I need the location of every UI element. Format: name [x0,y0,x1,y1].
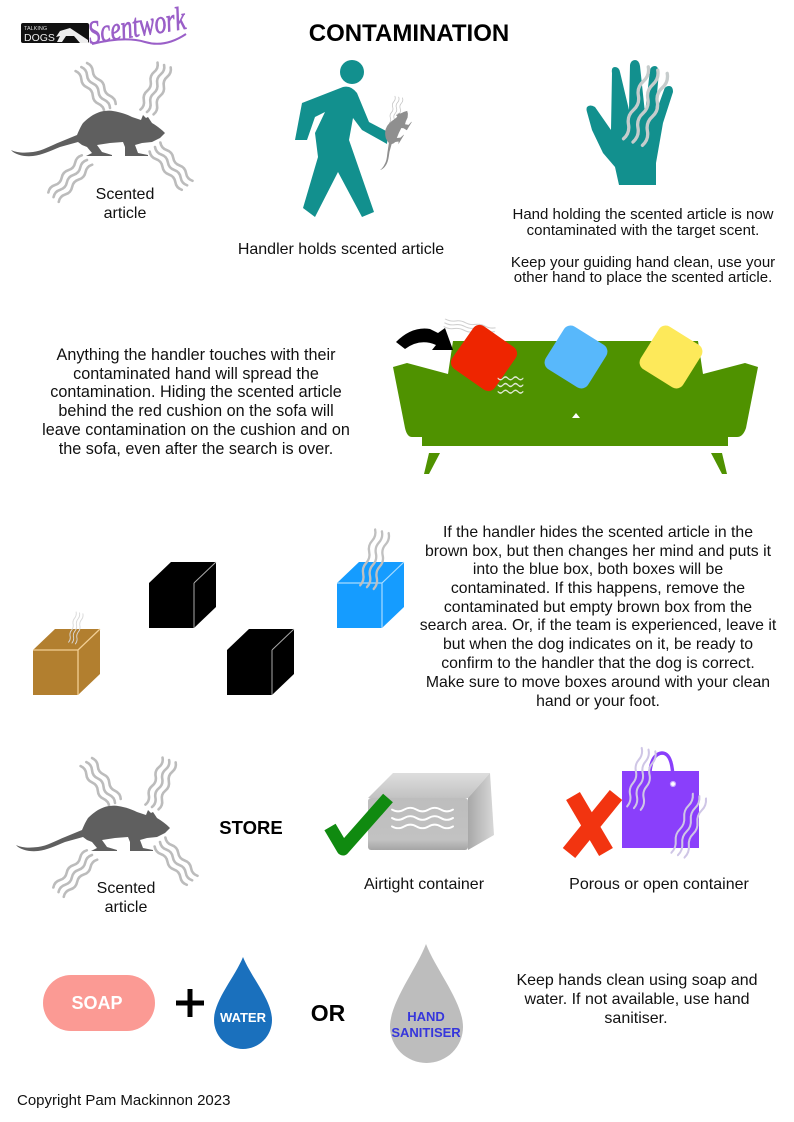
scent above red cushion [444,318,495,336]
icon: red cross [569,795,616,853]
title: CONTAMINATION [309,20,509,47]
text: boxes contamination: brown box, but then changes her mind and puts it [425,543,772,560]
label: scented article: article [104,205,146,222]
icon: empty black box [227,629,294,695]
text: hand contamination note: contaminated with the target scent. [527,222,759,239]
scent below red cushion [498,377,523,393]
yellow cushion [637,323,705,391]
label: scented article: Scented [96,186,154,203]
text: spreading contamination: behind the red cushion on the sofa will [58,402,334,420]
heading: store: STORE [219,817,283,838]
arrow onto red cushion [396,328,453,350]
text: hand contamination note: Hand holding the scented article is now [512,206,774,223]
label: scented article: article [105,899,147,916]
icon: soap bar [43,975,155,1031]
text: spreading contamination: contamination. Hiding the scented article [50,383,342,401]
label: porous or open container: Porous or open container [569,876,750,893]
blue cushion [542,323,610,391]
icon: handler holding scented article [295,60,416,217]
icon: contaminated hand [586,60,673,185]
icon: scented article rat, storage row [16,757,199,898]
icon: airtight container with green tick [330,773,494,850]
text: boxes contamination: into the blue box, both boxes will be [473,561,723,578]
icon: water drop [214,957,272,1049]
text: spreading contamination: contaminated hand will spread the [73,365,319,383]
red cushion [448,322,520,394]
label: airtight container: Airtight container [364,876,485,893]
text: keep hands clean: sanitiser. [604,1010,668,1027]
text: hand contamination note: Keep your guiding hand clean, use your [511,254,775,271]
icon: water drop: WATER [220,1010,267,1025]
icon: blue box with scent [337,529,404,628]
logo: Talking Dogs Scentwork [21,1,189,52]
label: scented article: Scented [97,880,155,897]
icon: hand sanitiser drop: SANITISER [391,1025,461,1040]
sofa body [393,341,758,446]
text: keep hands clean: Keep hands clean using soap and [516,972,758,989]
text: boxes contamination: but when the dog indicates on it, be ready to [443,636,753,653]
text: spreading contamination: the sofa, even after the search is over. [59,440,333,458]
text: boxes contamination: search area. Or, if the team is experienced, leave it [420,617,777,634]
icon: plus [176,989,204,1017]
icon: purple bag with scent [622,748,707,858]
logo: Talking Dogs Scentwork: DOGS [24,32,55,44]
text: hand contamination note: other hand to place the scented article. [514,269,772,286]
icon: green sofa with cushions [393,318,758,474]
text: keep hands clean: water. If not available, use hand [523,991,750,1008]
icon: soap bar: SOAP [71,993,123,1013]
text: spreading contamination: leave contamination on the cushion and on [42,421,350,439]
icon: hand sanitiser drop: HAND [407,1009,445,1024]
icon: brown box with faint scent [33,612,100,695]
label: handler holds scented article: Handler holds scented article [238,241,444,258]
text: boxes contamination: confirm to the handler that the dog is correct. [441,655,755,672]
icon: scented article rat with scent waves [11,62,194,203]
text: boxes contamination: contaminated. If this happens, remove the [451,580,745,597]
text: boxes contamination: Make sure to move boxes around with your clean [426,674,770,691]
icon: hand sanitiser drop [390,944,463,1063]
text: or: OR [311,1000,346,1026]
icon: empty black box [149,562,216,628]
sofa legs [424,453,727,474]
logo: Talking Dogs Scentwork: TALKING [24,26,47,32]
text: boxes contamination: contaminated but empty brown box from the [444,599,752,616]
text: spreading contamination: Anything the handler touches with their [57,346,336,364]
text: boxes contamination: hand or your foot. [536,693,660,710]
text: boxes contamination: If the handler hides the scented article in the [443,524,753,541]
copyright: Copyright Pam Mackinnon 2023 [17,1092,230,1109]
sofa button [572,413,580,418]
